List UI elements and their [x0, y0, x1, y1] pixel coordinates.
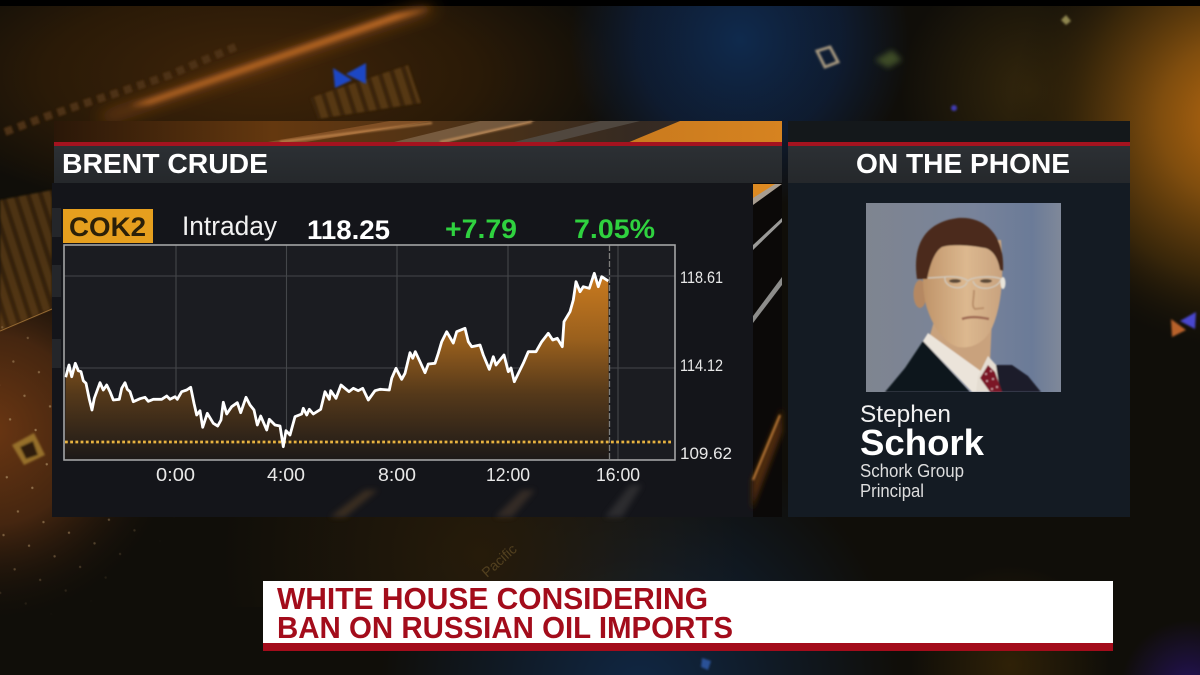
y axis labels: 109.62 [680, 444, 732, 463]
icon: left diamond [12, 433, 45, 465]
headline rule [263, 643, 1113, 651]
background dashed trail [5, 45, 240, 132]
left edge stripes [52, 208, 61, 368]
eyes [949, 279, 961, 283]
right stripes [752, 183, 782, 517]
area fill [65, 273, 609, 460]
name: last: Schork [860, 422, 985, 463]
ticker badge: COK2 [69, 212, 146, 242]
tie [980, 365, 1002, 392]
change percent: 7.05% [574, 214, 655, 244]
icon: small blue dot [951, 105, 957, 111]
panel header bar [54, 146, 782, 183]
panel header bar [788, 146, 1130, 183]
top black bar [0, 0, 1200, 6]
face [922, 240, 1002, 347]
headline line 2: BAN ON RUSSIAN OIL IMPORTS [277, 610, 733, 645]
panel: brent crude [52, 121, 782, 517]
chart frame [64, 245, 675, 460]
price: 118.25 [307, 215, 390, 245]
price line [66, 273, 608, 447]
icon: blue triangles [333, 63, 366, 88]
background label: Pacific [478, 541, 520, 580]
headline line 1: WHITE HOUSE CONSIDERING [277, 581, 708, 616]
ear [914, 280, 926, 308]
x axis labels: 8:00 [378, 465, 416, 485]
nose [973, 290, 984, 309]
role: Principal [860, 481, 924, 501]
glasses [928, 277, 1002, 288]
neck [928, 318, 992, 380]
y axis labels: 118.61 [680, 268, 723, 287]
panel top cap [788, 121, 1130, 143]
y axis labels: 114.12 [680, 356, 723, 375]
suit right [995, 365, 1041, 392]
panel red rule [54, 142, 782, 146]
change value: +7.79 [445, 214, 517, 244]
x axis labels: 16:00 [596, 465, 640, 485]
icon: small yellow diamond [1061, 15, 1071, 25]
panel body [788, 183, 1130, 517]
organisation: Schork Group [860, 461, 964, 481]
icon: small blue marker [701, 658, 711, 670]
panel red rule [788, 142, 1130, 146]
panel top band [54, 121, 782, 143]
panel body [52, 183, 753, 517]
mouth [962, 317, 989, 319]
y axis labels [680, 268, 732, 463]
label: intraday: Intraday [182, 211, 277, 241]
name: first: Stephen [860, 401, 951, 428]
heading: on the phone: ON THE PHONE [856, 148, 1070, 179]
icon: right triangles [1171, 312, 1196, 337]
suit left [885, 341, 970, 392]
icon: green diamond [875, 50, 902, 68]
icon: square outline [817, 47, 838, 67]
headline box [263, 581, 1113, 643]
panel bottom streaks [330, 485, 642, 517]
area chart [64, 245, 675, 460]
x axis labels: 12:00 [486, 465, 530, 485]
heading: brent crude: BRENT CRUDE [62, 148, 268, 179]
previous close dotted line [65, 441, 672, 443]
background hatched shape [310, 65, 421, 119]
portrait [866, 203, 1061, 392]
x axis labels: 4:00 [267, 465, 305, 485]
panel: on the phone [788, 121, 1130, 517]
shirt collar [923, 333, 982, 392]
light streak [95, 8, 440, 119]
x axis labels [156, 465, 640, 485]
x axis labels: 0:00 [156, 465, 195, 485]
hair [916, 218, 1003, 279]
headline lower third [263, 581, 1113, 651]
current time marker [608, 245, 610, 460]
